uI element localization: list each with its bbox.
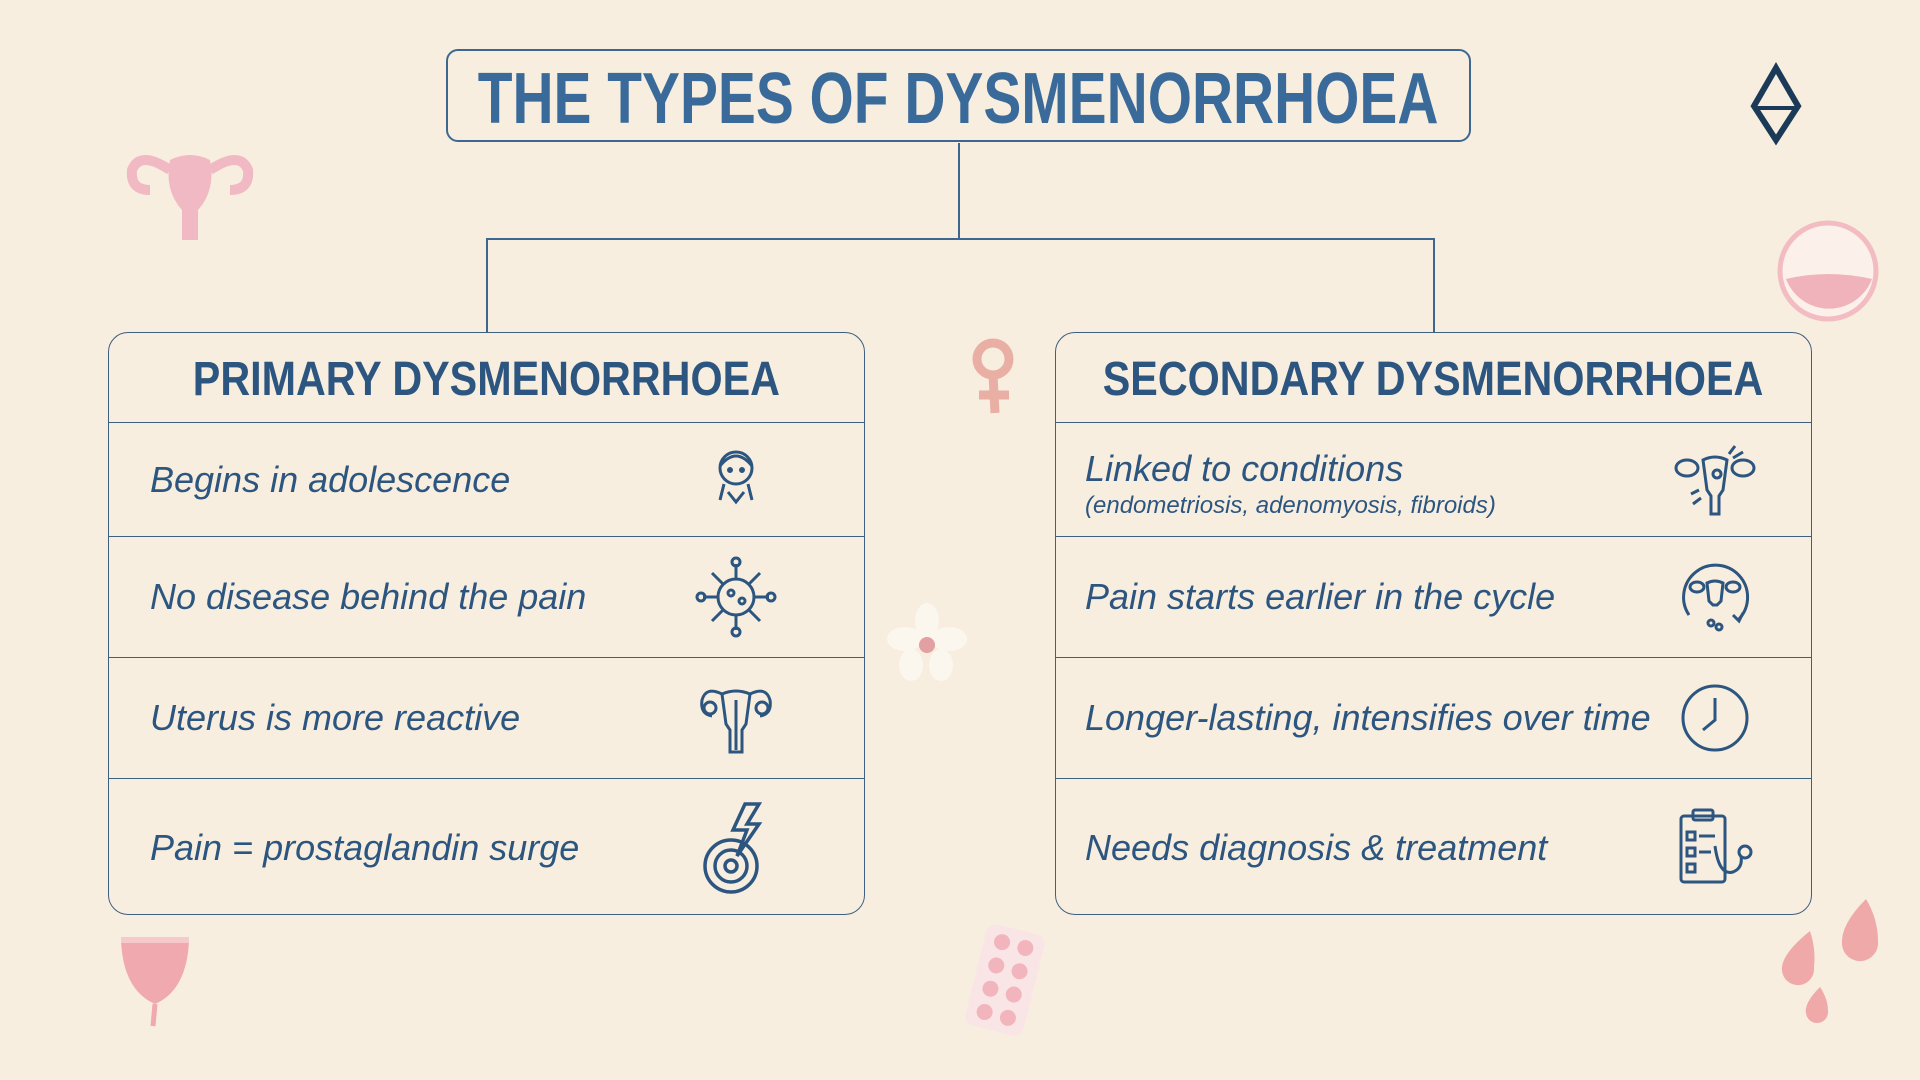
row: prostaglandin: Pain = prostaglandin surge — [150, 826, 579, 868]
decoration: flower — [887, 603, 967, 681]
icon: clock — [1682, 684, 1748, 752]
icon: uterus with spots — [1674, 445, 1756, 516]
row: adolescence: Begins in adolescence — [150, 458, 510, 500]
icon: clipboard stethoscope — [1680, 808, 1752, 884]
heading: primary: PRIMARY DYSMENORRHOEA — [193, 353, 780, 406]
row: uterus — [109, 658, 864, 779]
icon: pain target — [703, 802, 762, 894]
panel: secondary — [1055, 332, 1812, 915]
row: longer lasting — [1056, 658, 1811, 779]
row: linked to conditions: Linked to conditions — [1085, 448, 1403, 489]
decoration: drops — [1782, 899, 1878, 1023]
row: earlier in cycle — [1056, 537, 1811, 658]
row: diagnosis: Needs diagnosis & treatment — [1085, 826, 1547, 868]
row: diagnosis — [1085, 808, 1752, 884]
row: prostaglandin — [150, 802, 762, 894]
title: THE TYPES OF DYSMENORRHOEA — [478, 58, 1439, 138]
icon: cycle uterus — [1682, 564, 1750, 632]
icon: virus — [696, 556, 776, 638]
icon: uterus — [700, 690, 772, 754]
row: earlier in cycle: Pain starts earlier in the cycle — [1085, 576, 1555, 617]
heading: primary — [109, 333, 864, 423]
row: longer lasting: Longer-lasting, intensifies over time — [1085, 697, 1651, 738]
row: adolescence — [109, 423, 864, 537]
row: linked to conditions — [1056, 423, 1811, 537]
row: linked to conditions: (endometriosis, adenomyosis, fibroids) — [1085, 492, 1496, 519]
decoration: female symbol — [972, 338, 1014, 414]
heading: secondary — [1056, 333, 1811, 423]
decoration: uterus — [126, 155, 254, 240]
logo — [1750, 62, 1802, 146]
decoration: clock — [1778, 220, 1878, 322]
row: no disease: No disease behind the pain — [150, 576, 586, 617]
row: no disease — [109, 537, 864, 658]
connector lines — [486, 143, 1435, 332]
row: uterus: Uterus is more reactive — [150, 697, 520, 738]
icon: girl — [718, 450, 754, 504]
decoration: menstrual cup — [121, 937, 189, 1026]
decoration: pills — [966, 924, 1044, 1036]
heading: secondary: SECONDARY DYSMENORRHOEA — [1103, 353, 1764, 406]
panel: primary — [108, 332, 865, 915]
